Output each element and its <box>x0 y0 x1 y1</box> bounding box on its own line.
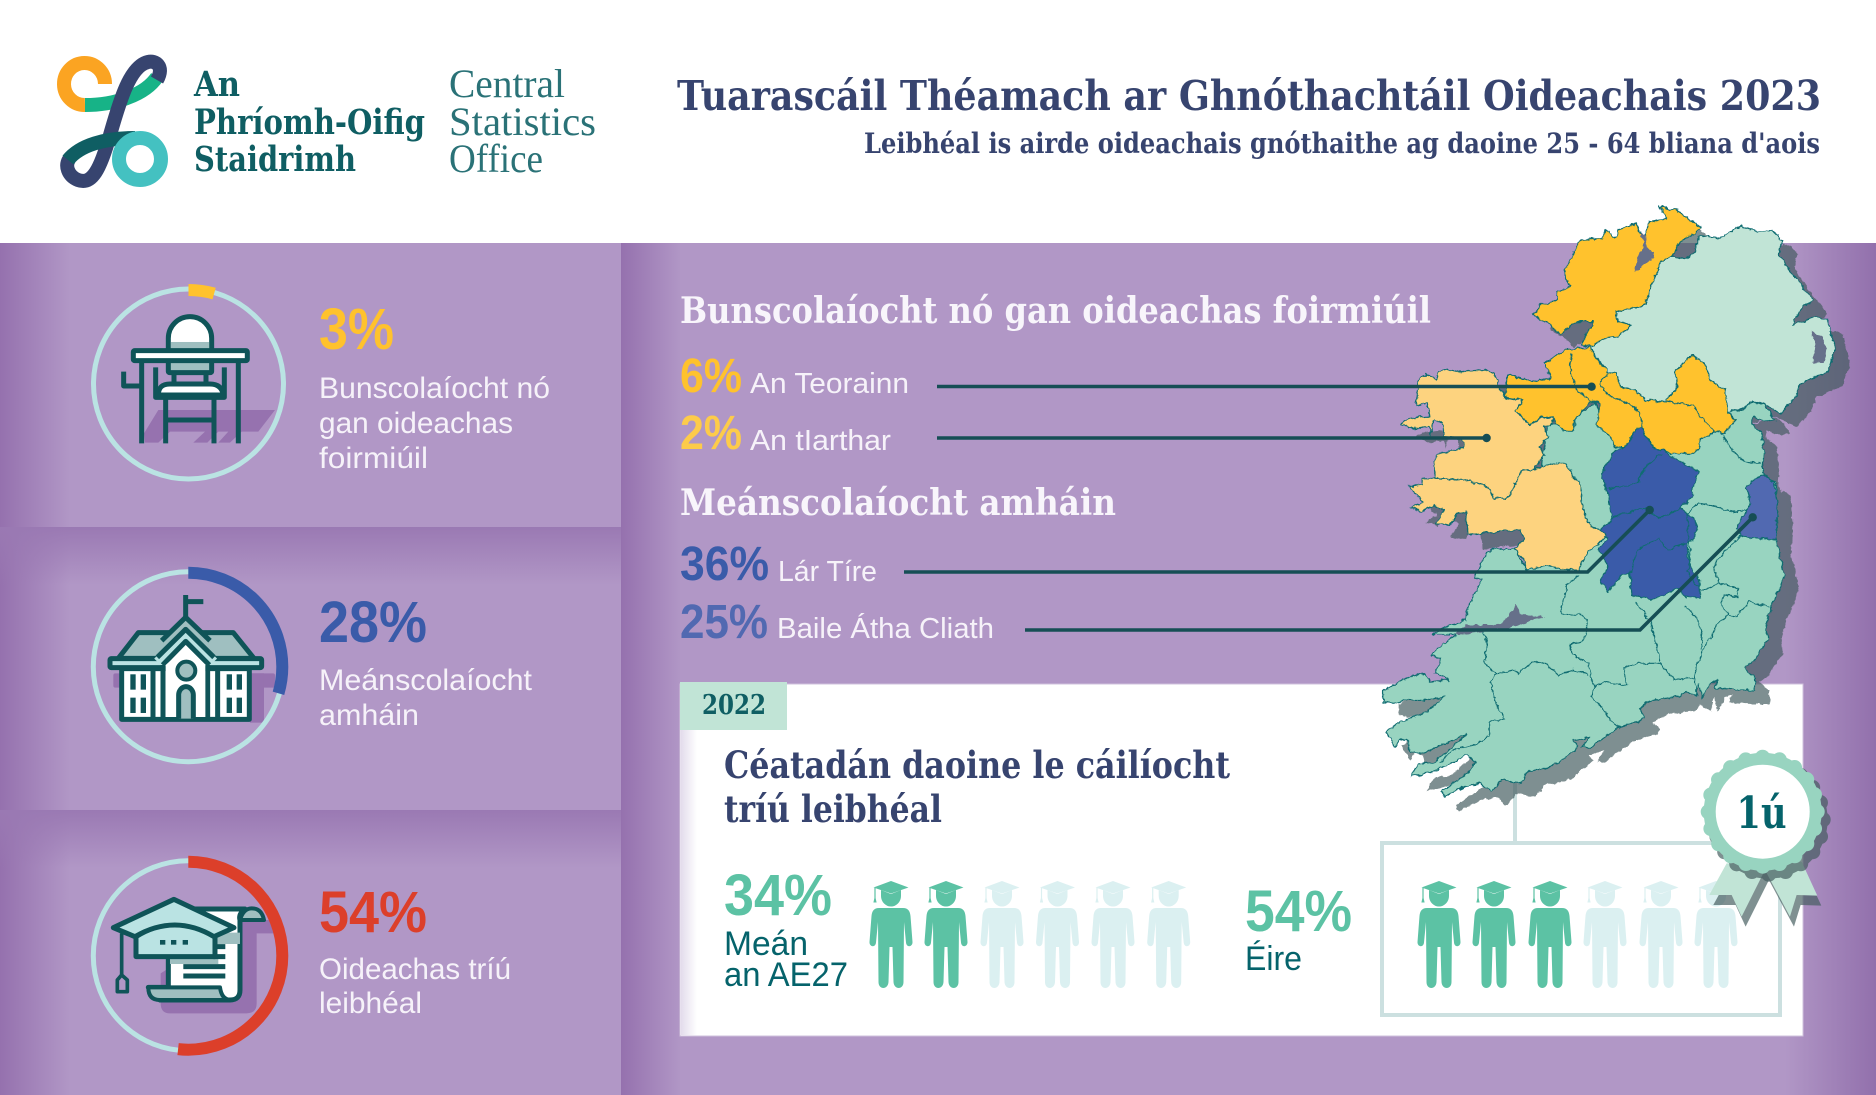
value: EU27 average 34% <box>724 863 848 994</box>
label: secondary <box>319 664 533 732</box>
value: 28%: 28% <box>319 590 427 655</box>
stat: Dublin 25% <box>680 596 994 649</box>
stat: Midlands 36%: Lár Tíre <box>778 556 877 588</box>
label: primary: gan oideachas <box>319 407 513 440</box>
purple background <box>0 243 1876 1095</box>
header background <box>0 0 1876 243</box>
stat: Border 6%: 6% <box>680 350 742 403</box>
region: West, Galway <box>1409 463 1608 570</box>
logo: English name: Central <box>449 61 565 106</box>
logo: Irish name: Phríomh-Oifig <box>194 102 425 143</box>
county borders <box>1441 353 1769 762</box>
rosette: first place: 1ú <box>1736 788 1786 839</box>
region: West, Mayo <box>1400 368 1553 498</box>
region: Dublin <box>1736 475 1778 540</box>
region: Border, Donegal <box>1534 207 1701 347</box>
region: Midlands <box>1598 428 1701 600</box>
stat: Midlands 36%: 36% <box>680 538 769 591</box>
label: primary: Bunscolaíocht nó <box>319 372 550 405</box>
stat: Dublin 25%: 25% <box>680 596 768 649</box>
logo: Irish name <box>193 64 425 180</box>
region: rest of the state <box>1384 402 1784 797</box>
icon: school <box>110 595 275 723</box>
logo: Irish name: Staidrimh <box>194 139 356 180</box>
ring chart: 54% <box>93 861 283 1051</box>
leader: Border <box>937 382 1596 391</box>
stat: Dublin 25%: Baile Átha Cliath <box>777 612 994 645</box>
rosette: first place <box>1704 753 1828 927</box>
value: 54%: 54% <box>319 880 427 945</box>
label: secondary: amháin <box>319 699 419 732</box>
logo: English name: Statistics <box>449 99 596 144</box>
heading: third level share: tríú leibhéal <box>724 787 942 831</box>
icon: graduation cap and scroll <box>113 899 274 1013</box>
icon: desk and chair <box>124 317 275 443</box>
pictogram: EU27 two of six graduates <box>869 881 1190 988</box>
map shadow <box>1399 221 1850 811</box>
heading: third level share <box>724 743 1230 831</box>
logo: English name <box>449 61 596 181</box>
stat: West 2%: 2% <box>680 407 742 460</box>
map of Ireland <box>1384 207 1850 811</box>
panel: upper secondary only <box>93 572 533 762</box>
stat: West 2% <box>680 407 891 460</box>
loughs and estuaries <box>1454 233 1826 635</box>
panel: third level education <box>93 861 511 1051</box>
stat: Border 6% <box>680 350 909 403</box>
stat: West 2%: An tIarthar <box>750 425 891 457</box>
label: third level: leibhéal <box>319 987 422 1020</box>
value: Ireland 54%: Éire <box>1245 940 1302 978</box>
pictogram: Ireland three of six graduates <box>1417 881 1738 988</box>
value: Ireland 54%: 54% <box>1245 879 1352 944</box>
tab: 2022: 2022 <box>702 690 766 721</box>
region: Border, south <box>1504 347 1735 453</box>
panel: primary or no formal education <box>94 289 550 479</box>
leader: Dublin <box>1025 513 1757 630</box>
heading: third level share: Céatadán daoine le cáilíocht <box>724 743 1230 787</box>
heading: upper secondary only: Meánscolaíocht amháin <box>680 482 1116 524</box>
tab: 2022 <box>680 682 787 730</box>
logo: Irish name: An <box>193 64 240 105</box>
label: primary <box>319 372 550 475</box>
panel: 2022 third level comparison <box>680 684 1803 1036</box>
ring chart: 3% <box>94 289 284 479</box>
heading: primary or no formal education: Bunscolaíocht nó gan oideachas foirmiúil <box>680 290 1431 332</box>
ring chart: 28% <box>93 572 283 762</box>
leader: West <box>937 434 1491 442</box>
value: EU27 average 34%: 34% <box>724 863 832 928</box>
region: Northern Ireland <box>1590 226 1835 413</box>
label: secondary: Meánscolaíocht <box>319 664 533 697</box>
leader: Midlands <box>904 506 1654 572</box>
box: Ireland <box>1382 843 1780 1015</box>
value: EU27 average 34%: an AE27 <box>724 956 848 994</box>
label: primary: foirmiúil <box>319 442 428 475</box>
label: third level <box>319 953 511 1020</box>
value: EU27 average 34%: Meán <box>724 925 808 963</box>
value: Ireland 54% <box>1245 879 1352 978</box>
connector: map to Ireland box <box>1513 770 1517 842</box>
logo: English name: Office <box>449 136 543 181</box>
value: 3%: 3% <box>319 297 394 362</box>
logo: CSO symbol <box>64 62 161 181</box>
stat: Midlands 36% <box>680 538 877 591</box>
stat: Border 6%: An Teorainn <box>750 368 909 400</box>
label: third level: Oideachas tríú <box>319 953 511 986</box>
